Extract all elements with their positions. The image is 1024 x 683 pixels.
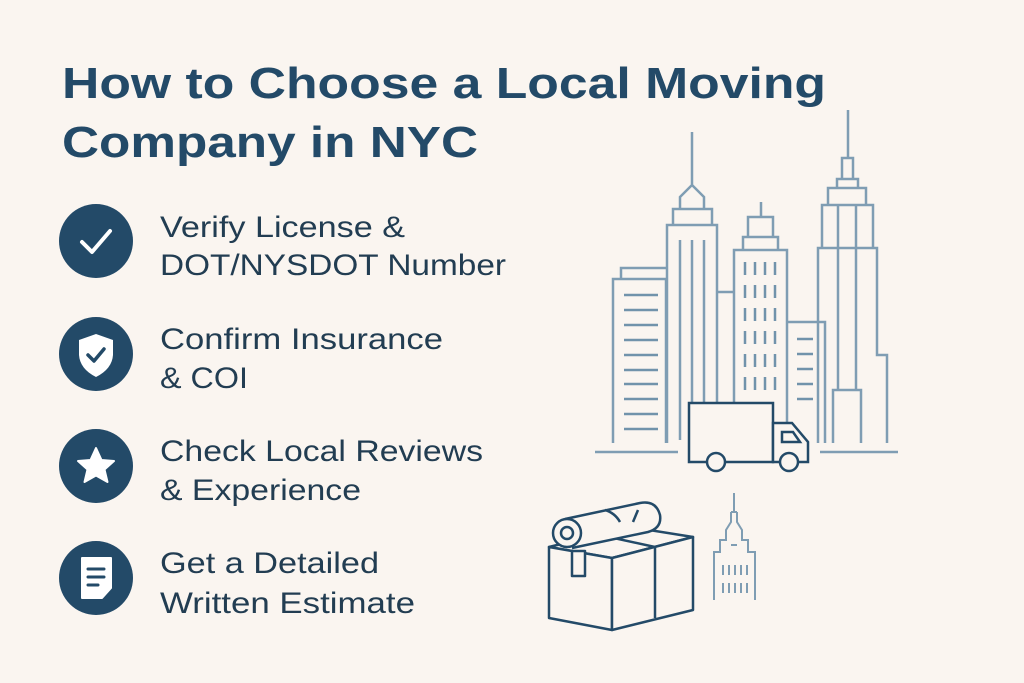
text: reviews: [160, 435, 483, 507]
icon: moving box with roll: [549, 502, 693, 630]
item: insurance: [59, 317, 443, 395]
text: estimate: [160, 547, 415, 620]
title: Company in NYC: [62, 118, 478, 167]
title: [62, 59, 826, 167]
item: reviews: [59, 429, 483, 507]
building right short: [787, 322, 825, 443]
text: reviews: & Experience: [160, 474, 361, 507]
text: insurance: [160, 323, 443, 395]
text: insurance: & COI: [160, 362, 248, 395]
text: estimate: Get a Detailed: [160, 547, 379, 580]
icon: shield: [59, 317, 133, 391]
building tall spire: [667, 132, 717, 443]
item: estimate: [59, 541, 415, 620]
title: How to Choose a Local Moving: [62, 59, 826, 108]
text: verify license: DOT/NYSDOT Number: [160, 249, 506, 282]
icon: star: [59, 429, 133, 503]
text: verify license: [160, 211, 506, 282]
text: insurance: Confirm Insurance: [160, 323, 443, 356]
icon: check circle: [59, 204, 133, 278]
icon: document: [59, 541, 133, 615]
illustration: city skyline: [595, 110, 898, 452]
text: verify license: Verify License &: [160, 211, 405, 244]
item: verify license: [59, 204, 506, 282]
building left: [613, 268, 666, 443]
empire building: [818, 110, 887, 443]
icon: moving truck: [689, 403, 808, 471]
text: reviews: Check Local Reviews: [160, 435, 483, 468]
building middle: [734, 202, 787, 403]
icon: small building: [714, 493, 755, 600]
text: estimate: Written Estimate: [160, 587, 415, 620]
